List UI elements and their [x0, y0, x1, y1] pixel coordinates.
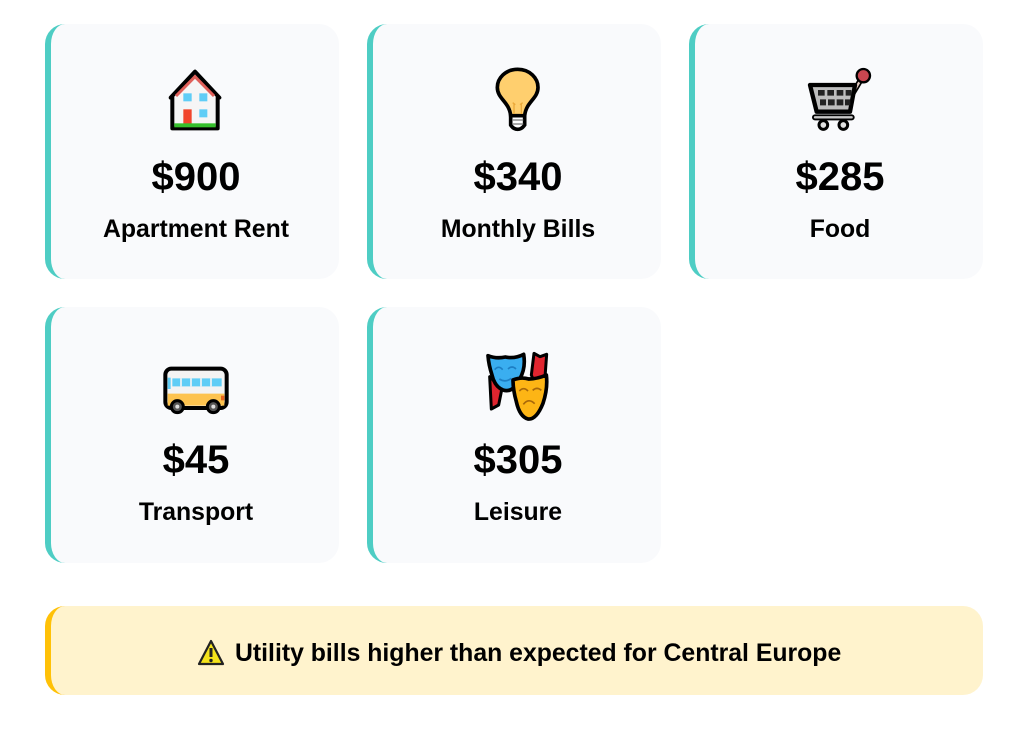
icon: warning triangle	[198, 640, 224, 666]
label: Food	[810, 216, 870, 243]
panel: apartment rent	[45, 24, 339, 279]
value: $305	[474, 438, 562, 482]
panel: food	[689, 24, 983, 279]
icon: house	[168, 70, 222, 130]
icon: light bulb	[496, 68, 540, 132]
icon: bus	[163, 366, 229, 414]
icon: theatre masks	[486, 352, 549, 421]
label: Leisure	[474, 499, 562, 526]
value: $340	[474, 155, 562, 199]
panel: transport	[45, 307, 339, 563]
callout text: Utility bills higher than expected for Central Europe	[235, 640, 841, 667]
value: $45	[163, 438, 229, 482]
label: Transport	[139, 499, 253, 526]
value: $285	[796, 155, 884, 199]
icon: shopping cart	[808, 68, 872, 131]
panel: leisure	[367, 307, 661, 563]
value: $900	[152, 155, 240, 199]
label: Apartment Rent	[103, 216, 289, 243]
panel: monthly bills	[367, 24, 661, 279]
label: Monthly Bills	[441, 216, 595, 243]
callout: utility bills warning	[45, 606, 983, 695]
